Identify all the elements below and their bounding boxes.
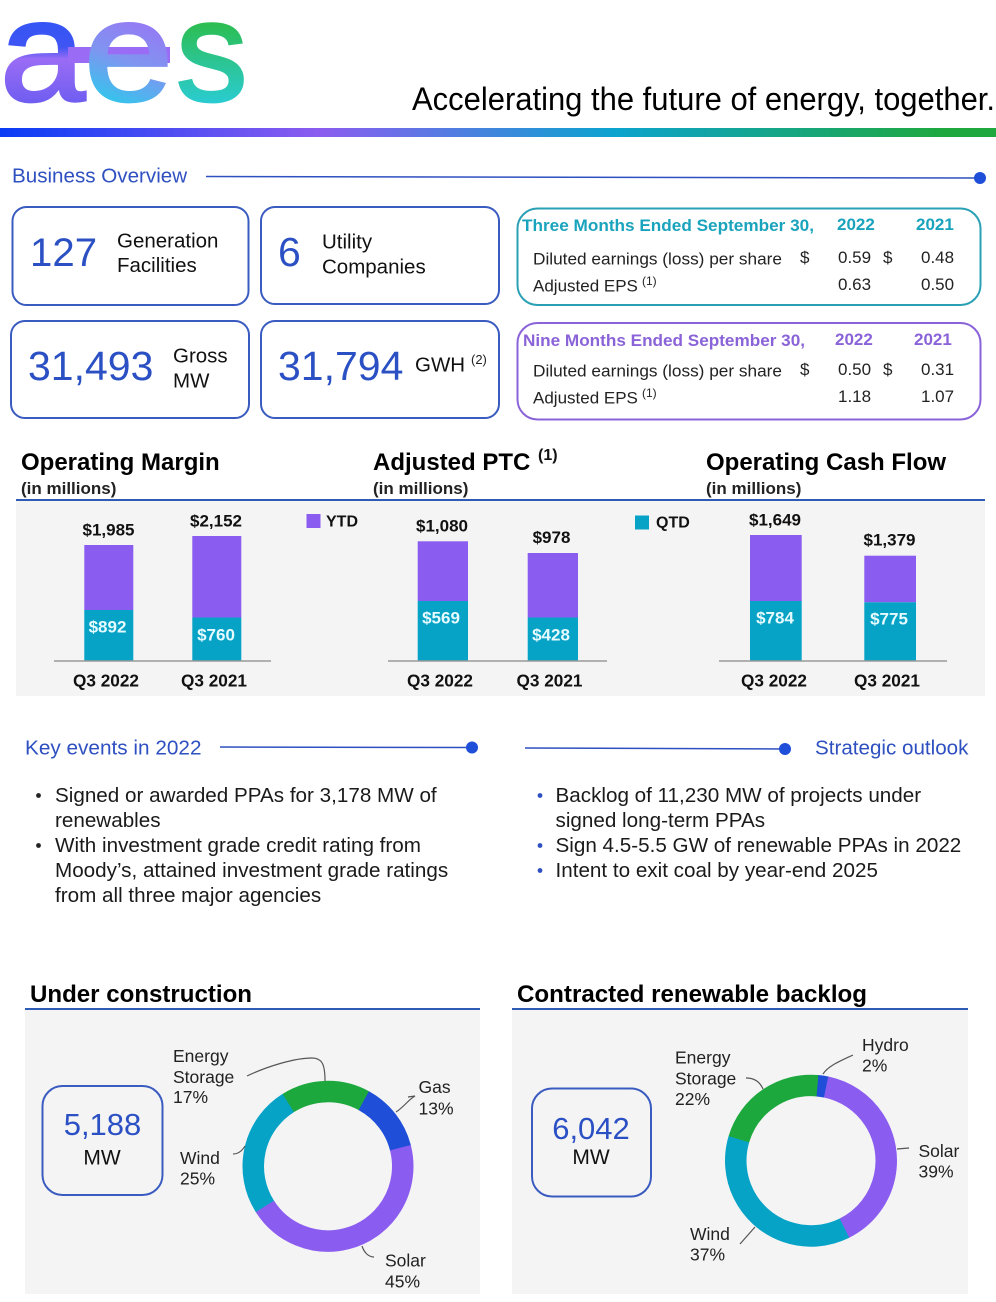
table: three months EPS: 0.48 (921, 248, 954, 267)
donut labels: contracted backlog: Storage (675, 1068, 736, 1088)
heading: strategic outlook (525, 736, 969, 760)
text block: strategic outlook list: Backlog of 11,230 MW of projects under (556, 784, 921, 807)
table: three months EPS: 2021 (916, 215, 954, 234)
table: nine months EPS: 1.18 (838, 387, 871, 406)
text block: key events list: Signed or awarded PPAs for 3,178 MW of (55, 784, 437, 807)
logo: aes (0, 0, 248, 132)
table: three months EPS: Adjusted EPS (533, 276, 638, 296)
table: three months EPS: (1) (642, 274, 657, 288)
stat: GWH (261, 321, 499, 418)
text block: key events list: from all three major agencies (55, 884, 321, 907)
donut labels: under construction: Solar (385, 1250, 426, 1270)
bar chart: adjusted PTC: $569 (422, 608, 460, 628)
bar chart: adjusted PTC: $428 (532, 626, 570, 644)
table: three months EPS: $ (883, 248, 893, 267)
bar chart: adjusted PTC: $1,080 (416, 516, 468, 536)
donut labels: under construction (173, 1046, 454, 1292)
bar chart: adjusted PTC: Q3 2021 (517, 670, 583, 690)
panel: contracted renewable backlog (512, 981, 968, 1294)
panel: bar charts background (16, 500, 985, 696)
bar chart: operating cash flow: Q3 2022 (741, 670, 807, 690)
stat box: 6,042 MW: 6,042 (552, 1111, 630, 1146)
table: three months EPS: 2022 (837, 215, 875, 234)
table: three months EPS: Three Months Ended September 30, (522, 216, 814, 235)
table: nine months EPS: 2022 (835, 330, 873, 349)
heading: strategic outlook: Strategic outlook (815, 736, 969, 760)
heading: business overview (12, 164, 986, 188)
legend: YTD: YTD (326, 514, 358, 530)
stat: GWH: GWH (415, 354, 465, 376)
donut labels: under construction: 45% (385, 1272, 420, 1292)
donut labels: contracted backlog: 22% (675, 1089, 710, 1109)
table: nine months EPS: 1.07 (921, 387, 954, 406)
bar chart: operating margin: Q3 2021 (181, 670, 247, 690)
table: nine months EPS: 2021 (914, 330, 952, 349)
heading: business overview: Business Overview (12, 164, 187, 188)
text block: key events list: renewables (55, 809, 161, 832)
donut labels: under construction: Storage (173, 1067, 234, 1087)
table: nine months EPS: Adjusted EPS (533, 388, 638, 408)
donut labels: under construction: 13% (418, 1098, 454, 1118)
table: three months EPS: $ (800, 248, 810, 267)
heading: key events (25, 736, 478, 760)
stat: generation facilities: 127 (30, 230, 97, 275)
stat: gross MW: 31,493 (28, 343, 153, 389)
table: nine months EPS: $ (800, 360, 810, 379)
donut labels: contracted backlog: Energy (675, 1048, 731, 1068)
chart headings: Operating Margin (21, 449, 220, 476)
chart headings: (in millions) (21, 479, 116, 498)
donut chart: contracted backlog (710, 1060, 912, 1261)
chart headings (21, 447, 946, 498)
table: three months EPS: 0.50 (921, 275, 954, 294)
bar chart: operating cash flow: $775 (870, 610, 908, 628)
donut labels: under construction: Wind (180, 1148, 220, 1168)
text block: strategic outlook list (538, 784, 961, 882)
chart headings: Adjusted PTC (373, 449, 530, 476)
legend: YTD (306, 514, 358, 530)
stat: GWH: (2) (471, 352, 487, 367)
stat box: 6,042 MW: MW (572, 1146, 610, 1169)
stat: generation facilities: Facilities (117, 254, 197, 277)
donut labels: contracted backlog: Wind (690, 1224, 730, 1244)
donut labels: contracted backlog: Solar (918, 1141, 960, 1161)
table: nine months EPS: (1) (642, 386, 657, 400)
text block: key events list: Moody’s, attained investment grade ratings (55, 859, 448, 882)
chart headings: (in millions) (706, 479, 801, 498)
donut labels: under construction: 25% (180, 1168, 215, 1188)
stat: gross MW: Gross (173, 344, 228, 368)
table: three months EPS: 0.63 (838, 275, 871, 294)
donut labels: contracted backlog (675, 1035, 960, 1264)
donut labels: contracted backlog: 37% (690, 1244, 725, 1264)
donut labels: contracted backlog: 2% (862, 1056, 887, 1076)
bar chart: operating cash flow: $1,649 (749, 510, 801, 530)
bar chart: operating cash flow (719, 510, 947, 690)
table: three months EPS: 0.59 (838, 248, 871, 267)
stat: GWH: 31,794 (278, 343, 403, 389)
stat box: 5,188 MW: MW (83, 1146, 121, 1170)
table: nine months EPS: $ (883, 360, 893, 379)
table: nine months EPS: 0.31 (921, 360, 954, 379)
legend: QTD: QTD (656, 514, 690, 532)
bar chart: operating margin (54, 512, 271, 690)
table: nine months EPS: Nine Months Ended September 30, (523, 331, 805, 350)
chart headings: (in millions) (373, 479, 468, 498)
table: three months EPS (518, 208, 980, 305)
donut labels: under construction: 17% (173, 1087, 208, 1107)
panel: under construction: Under construction (30, 981, 252, 1008)
bar chart: operating margin: Q3 2022 (73, 670, 139, 690)
bar chart: adjusted PTC (388, 516, 607, 690)
bar chart: operating cash flow: $1,379 (864, 530, 916, 550)
bar chart: operating margin: $892 (89, 618, 126, 636)
bar chart: adjusted PTC: Q3 2022 (407, 670, 473, 690)
stat: utility companies: Companies (322, 256, 426, 278)
stat: utility companies: 6 (278, 229, 301, 275)
donut labels: contracted backlog: 39% (918, 1162, 954, 1182)
stat box: 5,188 MW: 5,188 (64, 1107, 141, 1142)
legend: QTD (635, 514, 690, 532)
donut labels: under construction: Gas (418, 1077, 451, 1097)
text block: strategic outlook list: Sign 4.5-5.5 GW of renewable PPAs in 2022 (556, 834, 961, 857)
stat: gross MW: MW (173, 370, 210, 392)
text block: key events list: With investment grade credit rating from (55, 834, 421, 857)
panel: contracted renewable backlog: Contracted renewable backlog (517, 981, 867, 1008)
table: nine months EPS: Diluted earnings (loss) per share (533, 362, 782, 380)
donut labels: under construction: Energy (173, 1046, 229, 1066)
table: nine months EPS (518, 323, 980, 420)
stat: generation facilities (12, 207, 248, 305)
table: three months EPS: Diluted earnings (loss) per share (533, 250, 782, 268)
stat: utility companies (261, 207, 499, 304)
stat: generation facilities: Generation (117, 230, 218, 252)
chart headings: Operating Cash Flow (706, 449, 946, 476)
panel: under construction (25, 981, 480, 1294)
text block: strategic outlook list: signed long-term PPAs (556, 809, 765, 832)
donut chart: under construction (225, 1063, 431, 1269)
table: nine months EPS: 0.50 (838, 360, 871, 379)
stat box: 5,188 MW (42, 1086, 162, 1195)
stat: utility companies: Utility (322, 230, 373, 254)
stat box: 6,042 MW (532, 1088, 651, 1196)
bar chart: operating cash flow: Q3 2021 (854, 670, 920, 690)
bar chart: operating cash flow: $784 (756, 608, 794, 628)
text block: strategic outlook list: Intent to exit coal by year-end 2025 (556, 859, 878, 882)
bar chart: operating margin: $1,985 (82, 520, 134, 540)
chart headings: (1) (538, 447, 558, 464)
bar chart: operating margin: $760 (197, 626, 235, 644)
bar chart: operating margin: $2,152 (190, 512, 242, 530)
heading: key events: Key events in 2022 (25, 736, 202, 760)
text block: key events list (36, 784, 448, 907)
bar chart: adjusted PTC: $978 (533, 528, 570, 547)
header gradient bar (0, 128, 996, 137)
stat: gross MW (11, 321, 249, 418)
donut labels: contracted backlog: Hydro (862, 1035, 909, 1055)
